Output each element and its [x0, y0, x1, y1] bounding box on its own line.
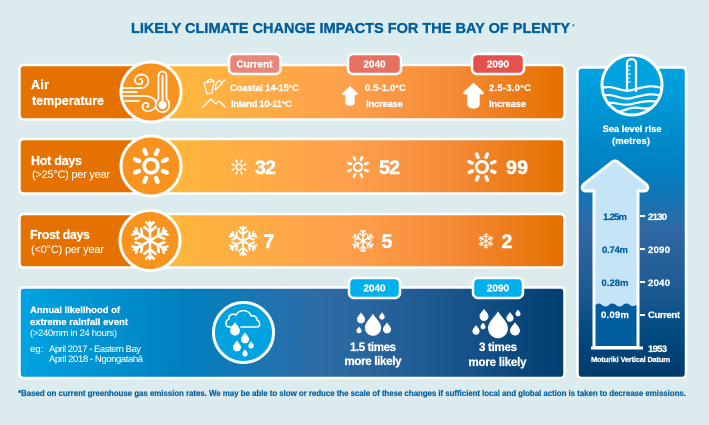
datum label: Moturiki Vertical Datum	[591, 355, 670, 364]
2040 temperature	[365, 83, 406, 110]
badge: current: Current	[236, 60, 273, 70]
badge: 2040	[349, 278, 400, 298]
badge: 2090	[473, 278, 523, 298]
sea level years	[648, 212, 681, 355]
heading: hot days	[31, 154, 110, 181]
badge: 2040: 2040	[363, 60, 386, 70]
heading: hot days: (>25°C) per year	[32, 169, 110, 181]
heading: air temperature: Air	[31, 78, 49, 92]
heading: hot days: Hot days	[31, 154, 82, 168]
badge: 2090	[472, 54, 524, 74]
value: frost days current	[229, 227, 274, 255]
icon: snowflake	[120, 210, 180, 270]
sea level values: 1.25m	[603, 212, 627, 223]
value: hot days 2040: 52	[379, 157, 400, 179]
value: hot days 2090: 99	[506, 157, 528, 179]
current temperatures: Inland 10-11°C	[231, 99, 292, 110]
2040 temperature: Increase	[366, 99, 403, 110]
panel: sea level rise	[578, 55, 686, 378]
heading: frost days: Frost days	[30, 228, 90, 242]
sea level values: 0.09m	[601, 310, 629, 321]
likelihood 2040: more likely	[344, 356, 402, 368]
sea level years: 2040	[648, 278, 670, 289]
likelihood 2090: 3 times	[479, 342, 517, 354]
sea level years: Current	[648, 310, 681, 321]
chart: sea level arrow	[582, 161, 648, 348]
panel: frost days	[20, 210, 564, 270]
sea level years: 1953	[648, 344, 667, 355]
current temperatures	[230, 83, 299, 110]
sea level years: 2130	[648, 212, 667, 223]
icon: wind and thermometer	[121, 62, 181, 122]
value: frost days 2090	[479, 231, 512, 253]
badge: 2040: 2040	[363, 284, 386, 294]
heading: sea level rise	[602, 124, 662, 147]
rainfall description: eg:	[30, 344, 43, 355]
badge: 2040	[348, 54, 401, 74]
icon: sea level gauge	[600, 55, 664, 115]
likelihood 2040: 1.5 times	[350, 342, 396, 354]
rainfall description: Annual likelihood of	[30, 305, 121, 316]
icon: small up arrow	[342, 86, 358, 106]
icon: rain drops 2040	[356, 312, 391, 336]
likelihood 2090	[468, 342, 527, 369]
rainfall description: April 2017 - Eastern Bay	[49, 344, 141, 355]
value: hot days current: 32	[255, 157, 276, 179]
icon: coastal bucket and spade	[204, 79, 225, 94]
value: frost days current: 7	[264, 231, 274, 253]
panel: extreme rainfall	[20, 278, 564, 378]
2090 temperature: 2.5-3.0°C	[489, 83, 531, 94]
heading: frost days: (<0°C) per year	[31, 244, 104, 256]
likelihood 2040	[344, 342, 402, 368]
sea level values: 0.28m	[602, 278, 628, 289]
icon: rain drops 2090	[472, 309, 521, 338]
value: hot days 2090	[469, 154, 528, 180]
icon: inland mountains	[203, 99, 225, 107]
badge: 2090: 2090	[487, 60, 510, 70]
current temperatures: Coastal 14-15°C	[230, 83, 299, 94]
likelihood 2090: more likely	[468, 357, 527, 369]
heading: sea level rise: Sea level rise	[602, 124, 662, 135]
rainfall description: (>240mm in 24 hours)	[30, 328, 117, 339]
icon: large up arrow	[463, 82, 484, 109]
sea level values	[601, 212, 629, 321]
value: hot days 2040	[348, 157, 400, 179]
badge: current	[229, 54, 280, 74]
value: frost days 2090: 2	[502, 231, 512, 253]
panel: air temperature	[20, 54, 564, 122]
icon: rain cloud	[214, 302, 274, 362]
sea level values: 0.74m	[602, 245, 628, 256]
sea level years: 2090	[648, 245, 670, 256]
heading: air temperature: temperature	[32, 94, 104, 108]
rainfall description: April 2018 - Ngongatahā	[49, 354, 144, 365]
title: *	[572, 24, 575, 31]
badge: 2090: 2090	[487, 284, 510, 294]
panel: hot days	[20, 136, 564, 196]
icon: sun	[121, 136, 181, 196]
value: frost days 2040	[352, 230, 392, 253]
2090 temperature: Increase	[489, 99, 526, 110]
heading: frost days	[30, 228, 104, 256]
value: frost days 2040: 5	[382, 231, 392, 253]
2090 temperature	[489, 83, 531, 110]
footnote: *Based on current greenhouse gas emission rates. We may be able to slow or reduce the scale of these changes if sufficient local and global action is taken to decrease emissions.	[18, 389, 686, 398]
2040 temperature: 0.5-1.0°C	[365, 83, 406, 94]
heading: air temperature	[31, 78, 104, 108]
rainfall description: extreme rainfall event	[30, 317, 129, 328]
value: hot days current	[232, 157, 276, 179]
heading: sea level rise: (metres)	[612, 136, 650, 147]
rainfall description	[30, 305, 144, 365]
title: LIKELY CLIMATE CHANGE IMPACTS FOR THE BAY OF PLENTY	[131, 21, 570, 37]
